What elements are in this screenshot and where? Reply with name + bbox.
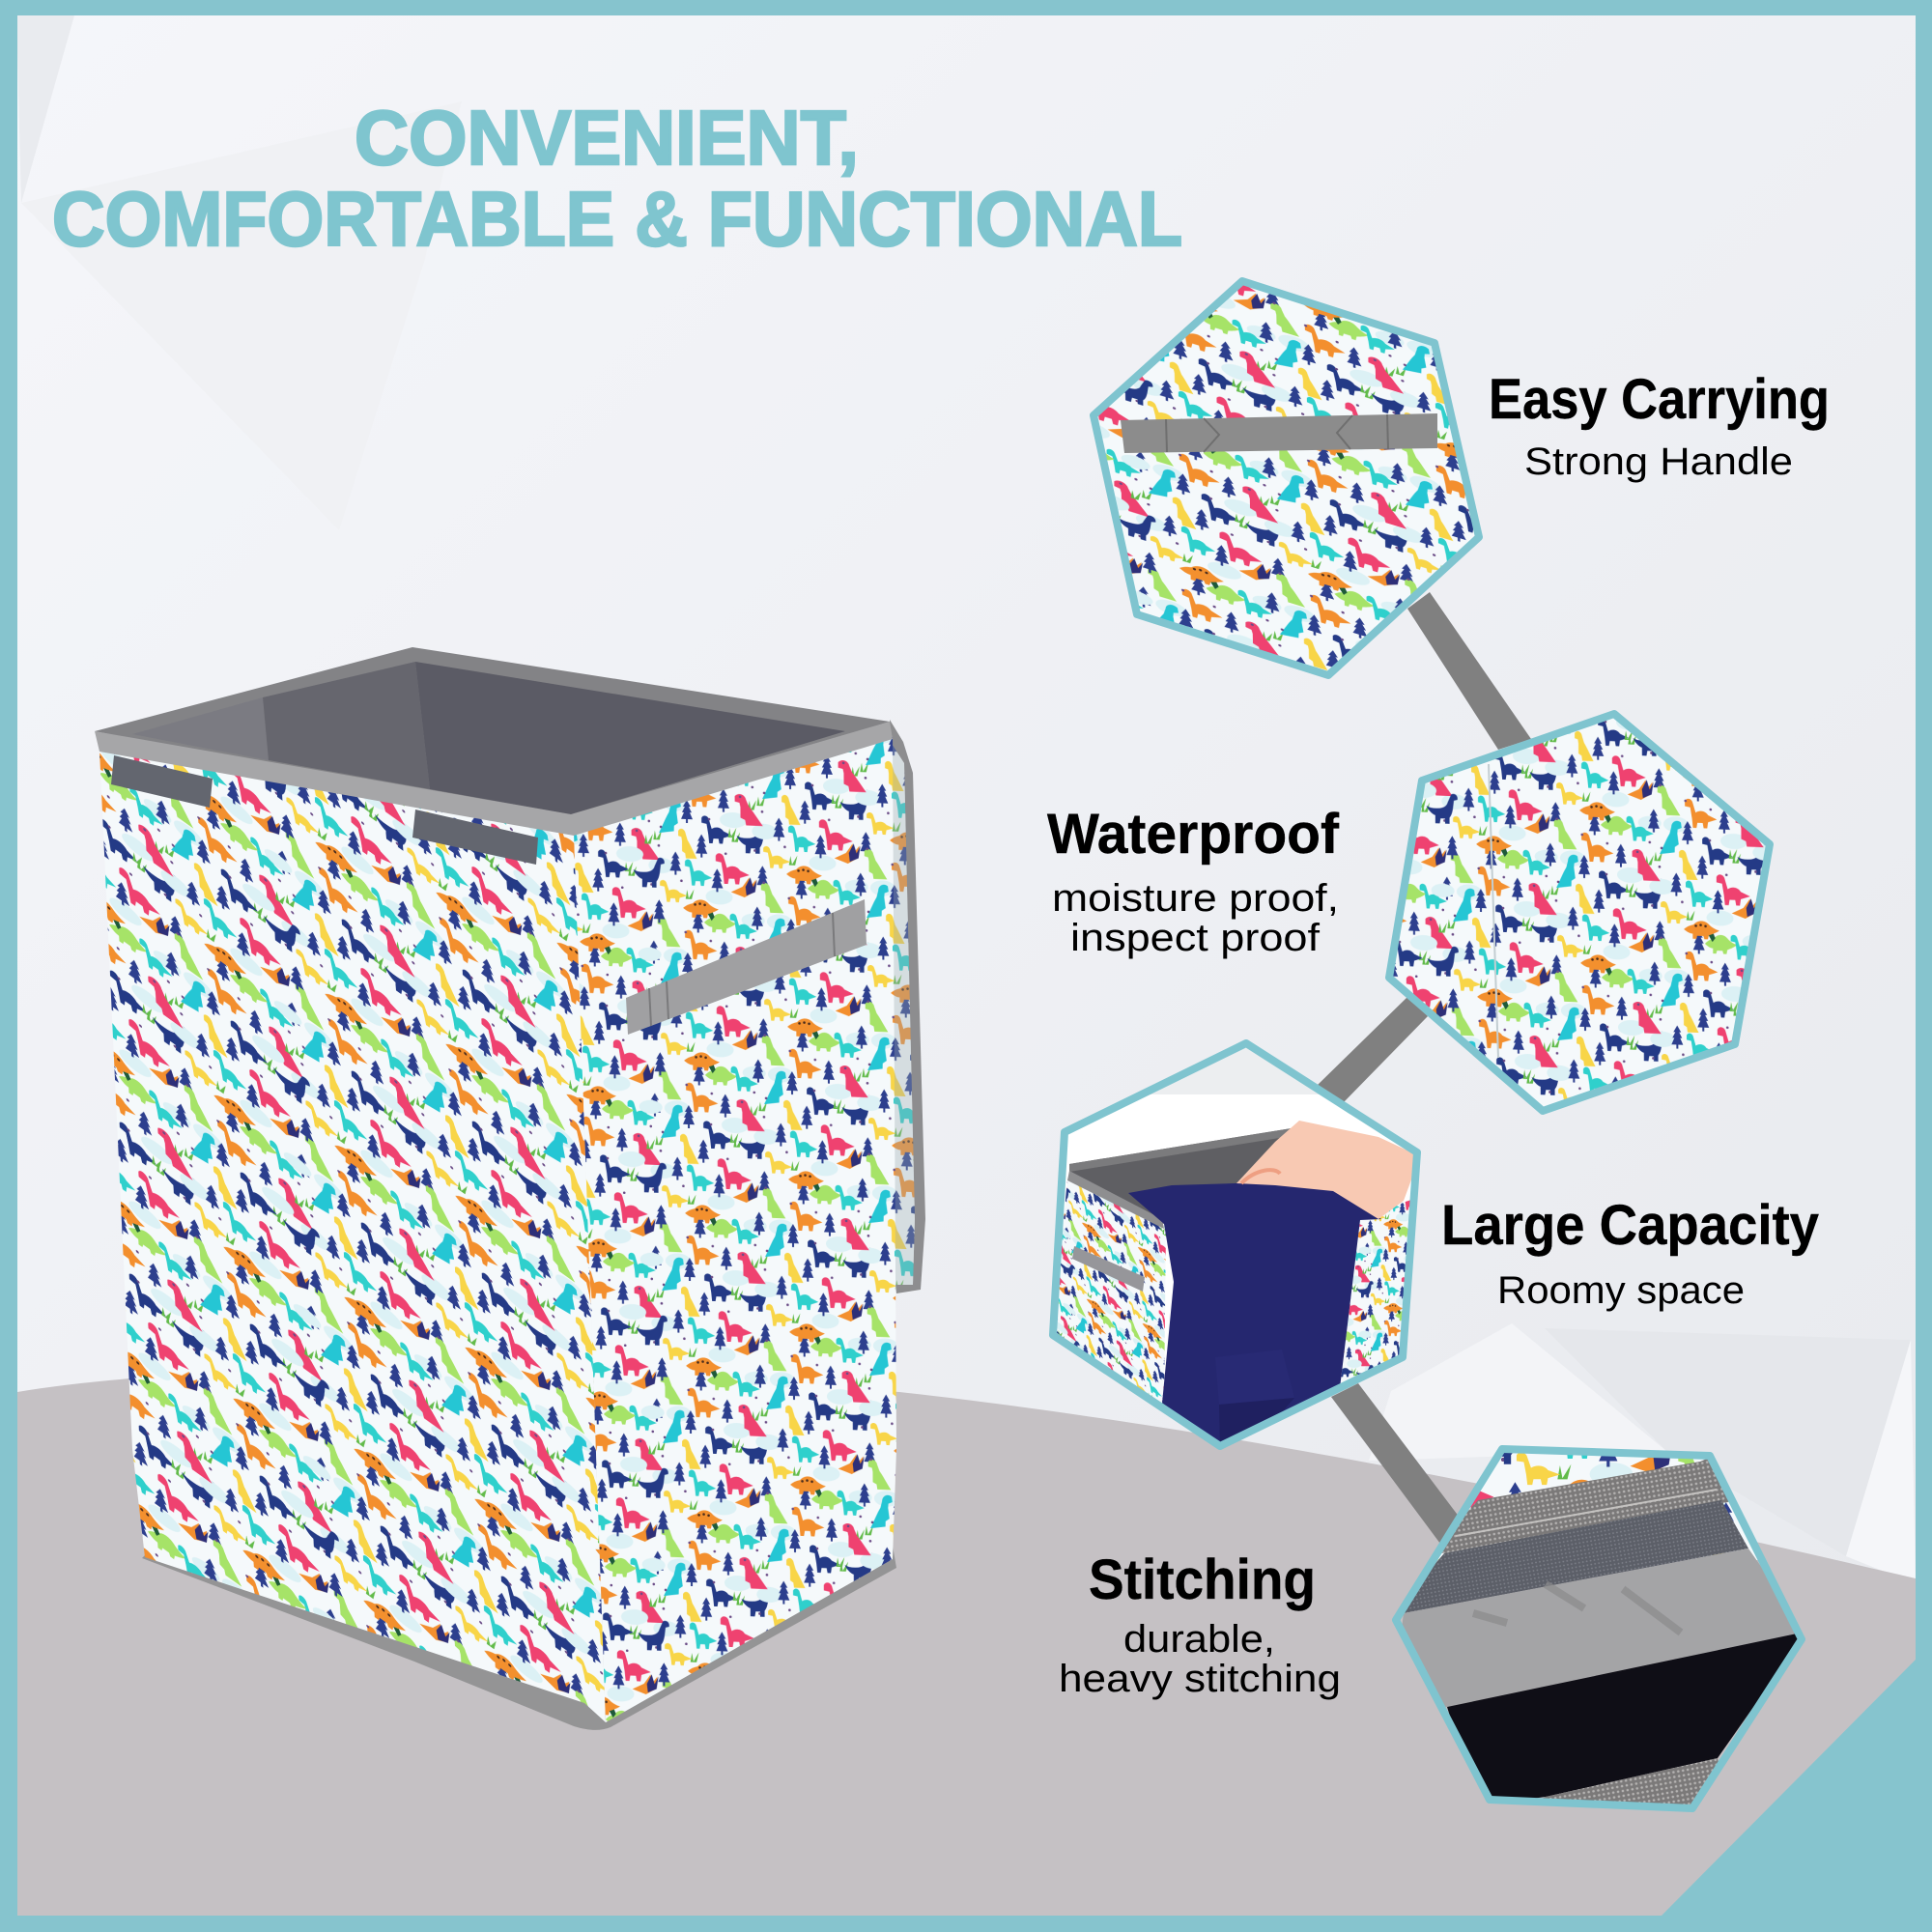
bottom trim xyxy=(142,1546,896,1730)
connector lines xyxy=(1317,592,1531,1544)
text: Easy Carrying: Easy Carrying xyxy=(1489,368,1830,431)
right face xyxy=(574,737,896,1722)
interior xyxy=(95,647,890,824)
title: CONVENIENT, xyxy=(355,95,859,181)
text: Stitching: heavy stitching xyxy=(1059,1658,1341,1700)
text: Easy Carrying xyxy=(1489,368,1830,483)
rim xyxy=(95,722,893,836)
text: Large Capacity xyxy=(1441,1194,1819,1312)
text: Waterproof: inspect proof xyxy=(1070,917,1321,959)
velcro strips xyxy=(111,755,538,865)
hexagon: large capacity photo xyxy=(1043,1034,1430,1459)
text: Waterproof: Waterproof xyxy=(1047,803,1340,866)
corner accent xyxy=(1662,1660,1916,1916)
title xyxy=(52,95,1182,262)
hexagon: handle close-up xyxy=(1094,281,1479,675)
left face xyxy=(99,751,606,1722)
text: Stitching xyxy=(1059,1548,1341,1700)
floor xyxy=(17,1370,1916,1916)
text: Easy Carrying: Strong Handle xyxy=(1524,440,1793,483)
text: Large Capacity: Roomy space xyxy=(1497,1269,1745,1312)
text: Waterproof xyxy=(1047,803,1340,959)
hexagon: stitching close-up xyxy=(1391,1444,1806,1816)
text: Waterproof: moisture proof, xyxy=(1052,877,1339,920)
side flap xyxy=(890,720,925,1293)
text: Large Capacity: Large Capacity xyxy=(1441,1194,1819,1257)
text: Stitching: durable, xyxy=(1123,1618,1275,1661)
product: dinosaur print storage box xyxy=(95,647,925,1730)
handle xyxy=(626,899,867,1035)
title: COMFORTABLE & FUNCTIONAL xyxy=(52,176,1182,262)
text: Stitching: Stitching xyxy=(1089,1548,1316,1611)
hexagon: waterproof fabric xyxy=(1389,714,1770,1111)
